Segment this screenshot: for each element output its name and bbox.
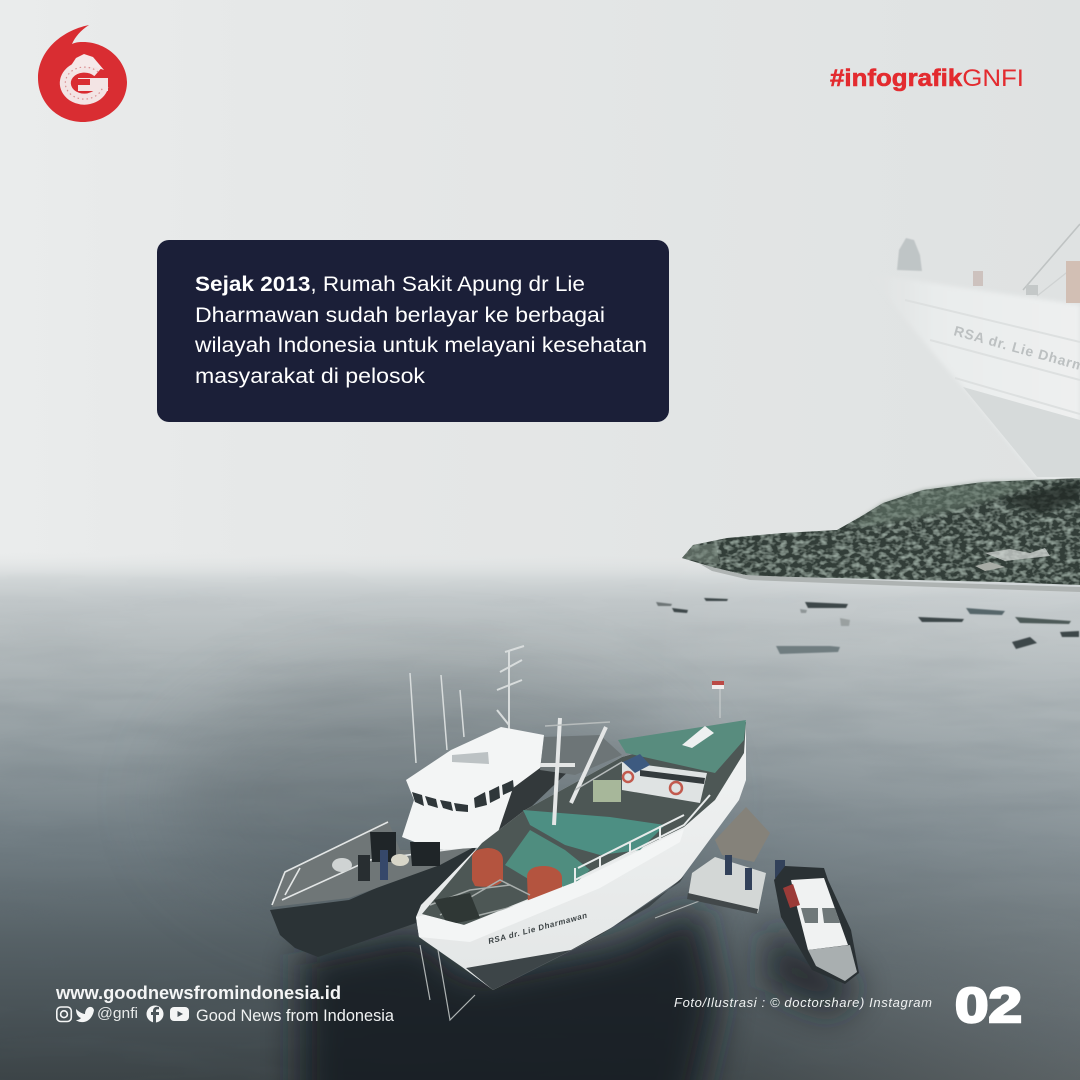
bow railing bbox=[272, 822, 476, 905]
background: misty sky bbox=[0, 0, 1080, 620]
small boats in the bay bbox=[656, 598, 1079, 654]
website url: www.goodnewsfromindonesia.id bbox=[55, 982, 341, 1003]
floating raft with net pile bbox=[687, 807, 785, 914]
wheelhouse bbox=[402, 727, 544, 850]
mast and booms bbox=[540, 718, 606, 825]
foredeck bbox=[272, 820, 476, 907]
icon: instagram bbox=[57, 1007, 71, 1022]
panel line 4: masyarakat di pelosok bbox=[195, 364, 425, 388]
bow white bulwark bbox=[416, 829, 684, 942]
page number: 02 bbox=[955, 979, 1022, 1033]
side deck shadow bbox=[493, 765, 575, 847]
social row bbox=[57, 1005, 395, 1025]
panel line 1: Sejak 2013 , Rumah Sakit Apung dr Lie bbox=[195, 272, 585, 296]
white hospital ship bbox=[416, 681, 746, 1020]
deck railing bbox=[575, 795, 710, 885]
icon: facebook bbox=[146, 1006, 164, 1023]
grey roof behind masts bbox=[540, 735, 622, 775]
upper green deck bbox=[618, 720, 746, 773]
hashtag: #infografik GNFI bbox=[830, 65, 1024, 92]
hull bbox=[416, 720, 746, 990]
mooring lines bbox=[420, 895, 715, 1020]
deck machinery bbox=[370, 832, 440, 866]
logo red swirl bbox=[38, 25, 127, 122]
background: sea gradient bbox=[0, 552, 1080, 1080]
blue tarp bbox=[623, 754, 650, 773]
logo G eagle emblem bbox=[65, 54, 108, 99]
deck bbox=[422, 722, 746, 925]
icon: youtube bbox=[170, 1007, 189, 1021]
life rings bbox=[623, 772, 682, 794]
ropes and clutter at bow bbox=[430, 880, 530, 920]
white parcel on roof bbox=[682, 726, 714, 748]
panel line 2: Dharmawan sudah berlayar ke berbagai bbox=[195, 303, 605, 327]
dark ship with white wheelhouse bbox=[270, 646, 575, 957]
icon: twitter bbox=[76, 1007, 94, 1022]
dark hull bbox=[270, 845, 476, 957]
mast and antennas bbox=[410, 646, 524, 763]
orange tanks bbox=[472, 848, 562, 906]
hull name: RSA dr. Lie Dharmawan bbox=[487, 911, 588, 946]
logo: GNFI bbox=[38, 25, 127, 122]
panel line 3: wilayah Indonesia untuk melayani kesehatan bbox=[194, 333, 647, 357]
speedboat bbox=[774, 866, 859, 984]
text panel bbox=[157, 240, 669, 422]
ghosted ship bow at upper right bbox=[870, 224, 1080, 477]
main green deck bbox=[523, 810, 665, 855]
upper windows bbox=[452, 752, 489, 764]
wheelhouse windows bbox=[412, 780, 514, 812]
hull lower shadow bbox=[466, 876, 684, 990]
flag bbox=[712, 681, 724, 685]
island with palm forest bbox=[682, 478, 1080, 592]
cabin front bbox=[622, 762, 707, 803]
channel name: Good News from Indonesia bbox=[196, 1006, 395, 1025]
handle: @gnfi bbox=[97, 1005, 138, 1022]
photo credit: Foto/Ilustrasi : © doctorshare) Instagram bbox=[674, 995, 932, 1010]
green crates bbox=[593, 780, 621, 802]
